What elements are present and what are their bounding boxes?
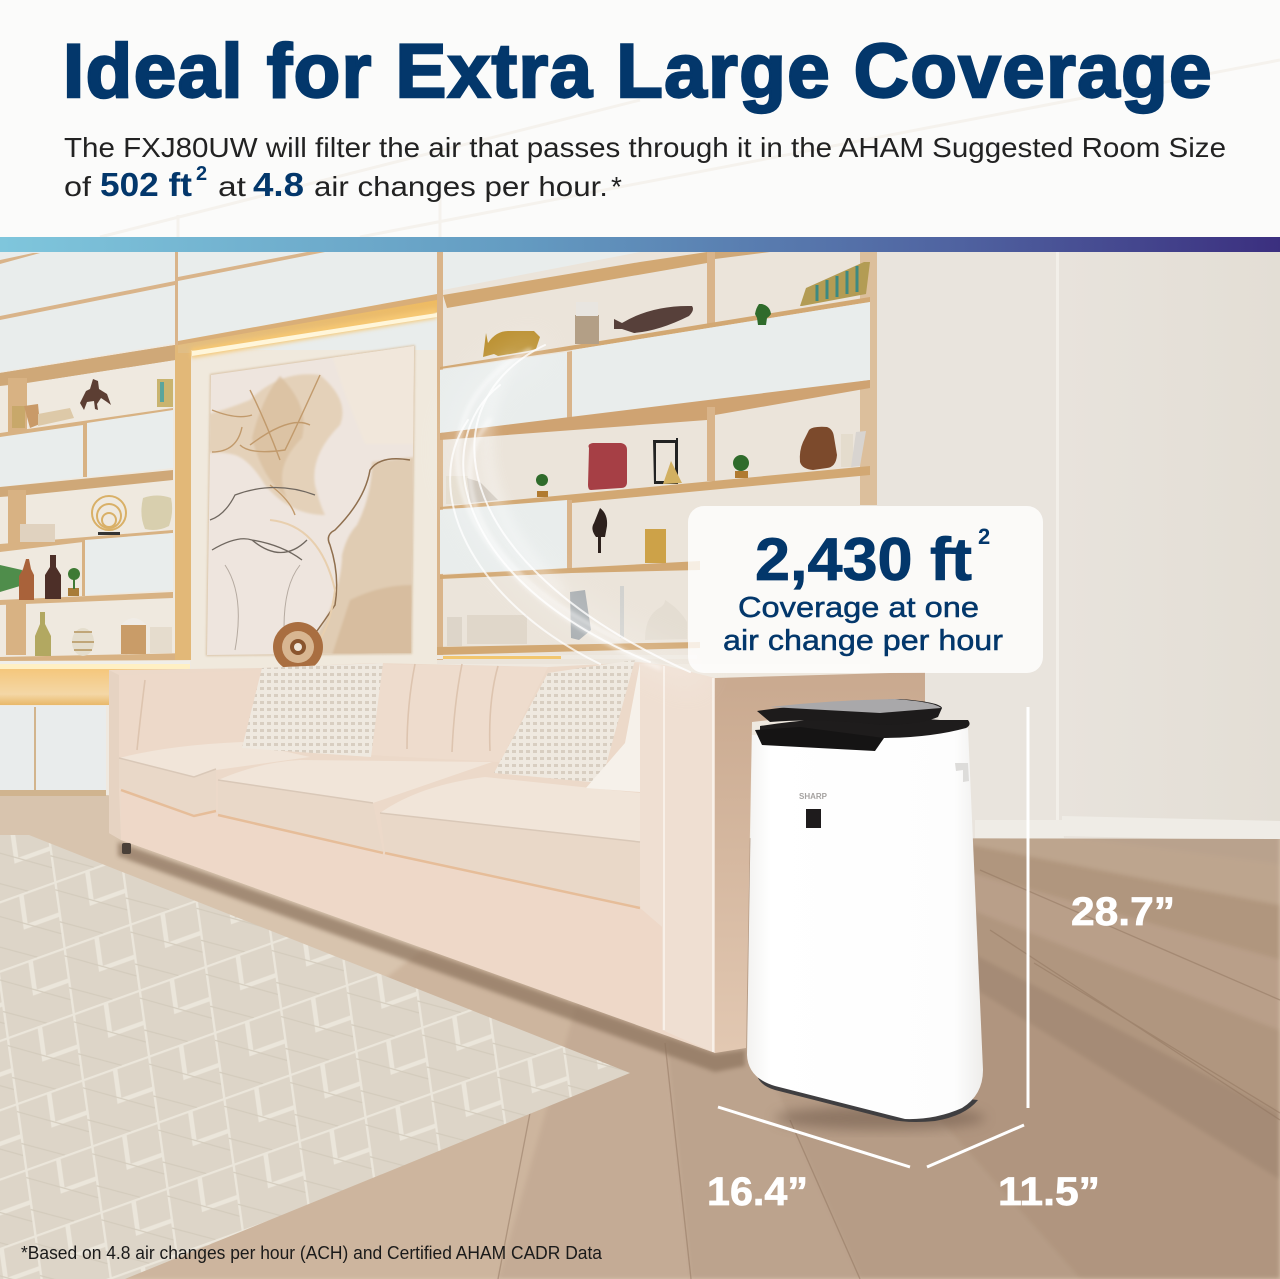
air purifier xyxy=(747,699,983,1122)
subtitle line 2: of xyxy=(64,171,91,202)
wooden gear ornament xyxy=(273,622,323,672)
footnote: *Based on 4.8 air changes per hour (ACH) and Certified AHAM CADR Data xyxy=(21,1243,603,1263)
top band and wall behind painting xyxy=(178,252,438,670)
purifier base xyxy=(758,1078,978,1122)
subtitle line 2: 2 xyxy=(196,163,207,185)
sofa xyxy=(109,660,925,1053)
sofa back cushions xyxy=(109,664,548,840)
sofa seat cushions xyxy=(119,742,640,908)
wood floor xyxy=(0,780,1280,1279)
subtitle line 1: The FXJ80UW will filter the air that passes through it in the AHAM Suggested Room Size xyxy=(64,132,1226,163)
subtitle line 2: at xyxy=(218,171,246,202)
side handle notch xyxy=(955,763,969,782)
subtitle line 2 xyxy=(64,163,622,203)
pillows xyxy=(242,660,640,792)
sofa skirt xyxy=(121,792,700,1047)
coverage superscript: 2 xyxy=(978,524,990,549)
subtitle line 2: 4.8 xyxy=(253,166,304,203)
coverage caption line 2: air change per hour xyxy=(723,625,1003,657)
subtitle line 2: air changes per hour. xyxy=(314,171,608,202)
subtitle line 2: 502 ft xyxy=(100,166,192,203)
purifier body xyxy=(747,728,983,1119)
sofa right arm front xyxy=(640,664,715,1053)
dimension label: width: 16.4” xyxy=(707,1170,808,1214)
right wall xyxy=(870,252,1280,842)
subtitle line 2: * xyxy=(611,171,622,202)
sofa right arm side xyxy=(715,672,925,1053)
title: Ideal for Extra Large Coverage xyxy=(63,29,1213,114)
shelving wall: right unit xyxy=(437,252,877,664)
purifier floor shadow xyxy=(775,1106,985,1130)
dimension label: height: 28.7” xyxy=(1071,890,1175,934)
SHARP logo: SHARP xyxy=(799,792,828,801)
shelving wall: left unit xyxy=(0,252,191,796)
white dimension lines xyxy=(718,707,1028,1167)
coverage callout xyxy=(688,506,1043,673)
control badge xyxy=(806,809,821,828)
area rug xyxy=(0,835,630,1279)
gradient divider bar xyxy=(0,237,1280,252)
coverage caption line 1: Coverage at one xyxy=(738,592,979,624)
sofa body xyxy=(109,662,715,1053)
dimension label: depth: 11.5” xyxy=(998,1170,1100,1214)
coverage figure: 2,430 ft xyxy=(755,526,972,593)
airflow swirl lines xyxy=(450,345,690,672)
shelf decor: left unit xyxy=(0,379,173,656)
purifier lid xyxy=(755,699,970,751)
shelf decor: right unit xyxy=(446,262,870,646)
floor shadow under sofa xyxy=(118,842,745,1072)
header panel xyxy=(0,0,1280,237)
painting: marble art xyxy=(205,344,415,660)
